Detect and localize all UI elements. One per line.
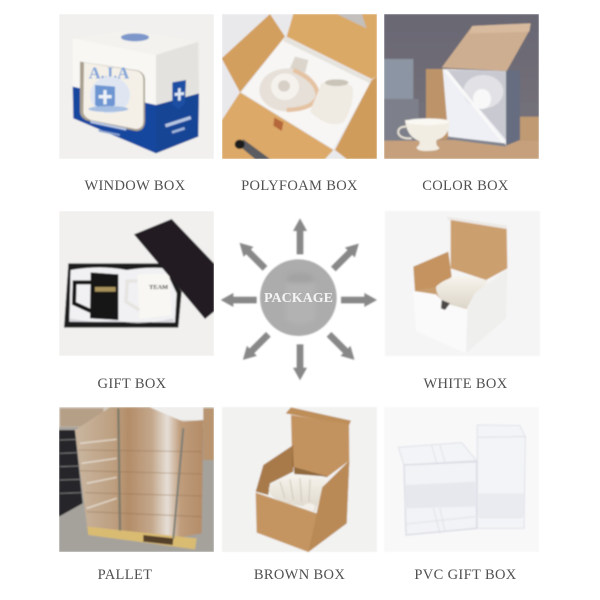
panel: gift box photo: TEAM	[149, 284, 168, 291]
arrow: down-left	[238, 329, 273, 365]
package text: PACKAGE	[264, 291, 333, 306]
package circle	[260, 259, 337, 336]
label: pallet: PALLET	[98, 567, 152, 583]
panel: gift box photo	[59, 211, 214, 356]
center: package circle with arrows	[221, 218, 377, 380]
label: pvc gift box: PVC GIFT BOX	[414, 567, 517, 583]
label: gift box: GIFT BOX	[98, 376, 167, 392]
label: brown box: BROWN BOX	[254, 567, 345, 583]
arrow: down	[293, 344, 307, 380]
arrow: up-left	[235, 238, 270, 273]
label: window box: WINDOW BOX	[84, 178, 186, 194]
arrow: down-right	[324, 329, 359, 365]
panel: window box photo	[59, 14, 214, 159]
arrow: up	[293, 218, 307, 254]
arrow: up-right	[328, 239, 364, 274]
panel: color box photo	[384, 14, 539, 159]
panel: pallet photo	[59, 407, 214, 552]
label: polyfoam box: POLYFOAM BOX	[241, 178, 358, 194]
panel: brown box photo	[222, 407, 377, 552]
panel: pvc gift box photo	[384, 407, 539, 552]
panel: window box photo: A.J.A	[89, 63, 129, 82]
panel: white box photo	[385, 211, 540, 356]
label: white box: WHITE BOX	[423, 376, 508, 392]
arrow: left	[221, 293, 257, 307]
panel: polyfoam box photo	[222, 14, 377, 159]
label: color box: COLOR BOX	[422, 178, 509, 194]
arrow: right	[341, 293, 377, 307]
